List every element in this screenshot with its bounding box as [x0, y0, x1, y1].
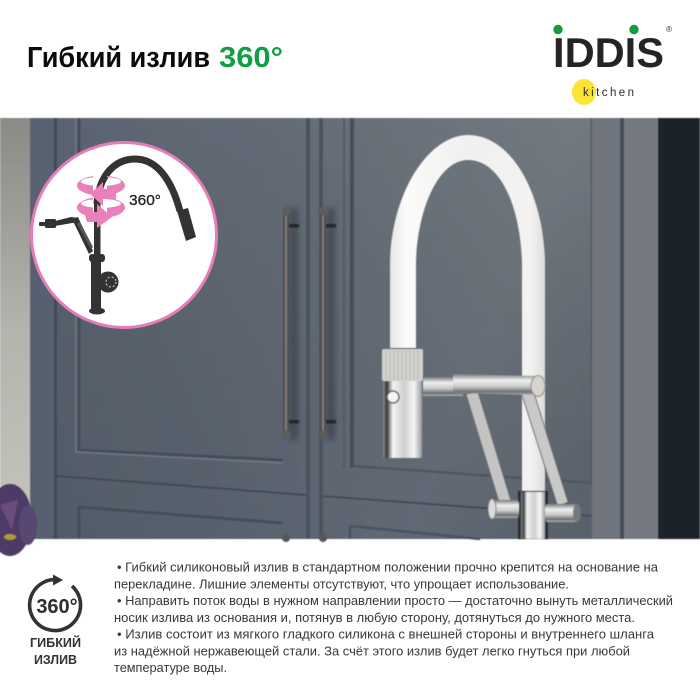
callout: 360 degree rotation diagram [32, 142, 216, 328]
text block: description: • Излив состоит из мягкого гладкого силикона с внешней стороны и внутреннего шланга [117, 626, 655, 642]
faucet: chrome nozzle [382, 349, 423, 458]
text block: description: носик излива из основания и, потянув в любую сторону, дотянуться до нужного места. [114, 610, 635, 625]
faucet: chrome arm and struts [423, 374, 568, 507]
photo: kitchen cabinets with faucet [0, 118, 700, 556]
badge arrow head [53, 574, 63, 586]
kitchen word: kitchen [583, 87, 634, 99]
flower at bottom left [0, 484, 37, 556]
badge caption: ГИБКИЙ [30, 635, 81, 650]
360 degree label: 360° [129, 192, 161, 209]
icon: 360 degree rotation badge: ИЗЛИВ [34, 652, 77, 667]
title: 360° [219, 42, 283, 74]
text block: description: перекладине. Лишние элементы отсутствуют, что упрощает использование. [114, 576, 569, 592]
callout circle [32, 142, 216, 328]
logo: IDDIS kitchen [553, 24, 673, 105]
text block: description: • Направить поток воды в нужном направлении просто — достаточно вынуть металлический [117, 593, 673, 608]
faucet: base and knobs [488, 491, 581, 539]
pink rotation arrows [77, 176, 125, 228]
title: Гибкий излив [27, 42, 210, 74]
yellow blob [572, 79, 596, 105]
icon: 360 degree rotation badge [30, 574, 81, 667]
badge number: 360° [36, 596, 78, 618]
badge ring [30, 580, 81, 631]
registered mark: ® [666, 24, 673, 34]
cabinet handles [282, 206, 336, 542]
text block: description: температуре воды. [114, 660, 227, 675]
text block: description: из надёжной нержавеющей стали. За счёт этого излив будет легко гнуться при любой [114, 644, 630, 658]
logo wordmark: IDDIS [553, 29, 664, 76]
faucet pictogram [39, 159, 196, 314]
text block: description: • Гибкий силиконовый излив в стандартном положении прочно крепится на основание на [117, 560, 659, 574]
logo green dots [553, 25, 639, 34]
cabinet background [0, 118, 700, 539]
text block: description [114, 560, 673, 675]
faucet: white silicone spout [390, 135, 545, 492]
